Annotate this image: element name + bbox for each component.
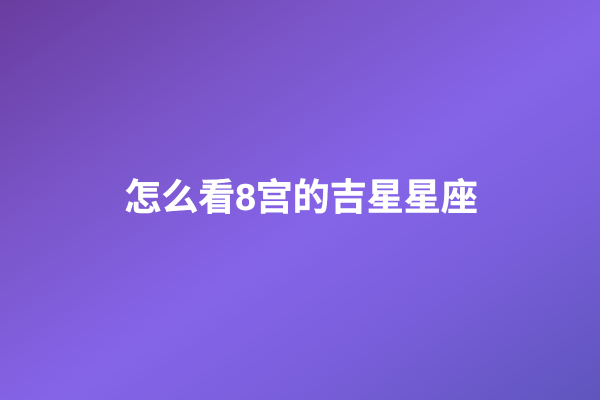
title: 怎么看8宫的吉星星座 <box>124 177 478 218</box>
